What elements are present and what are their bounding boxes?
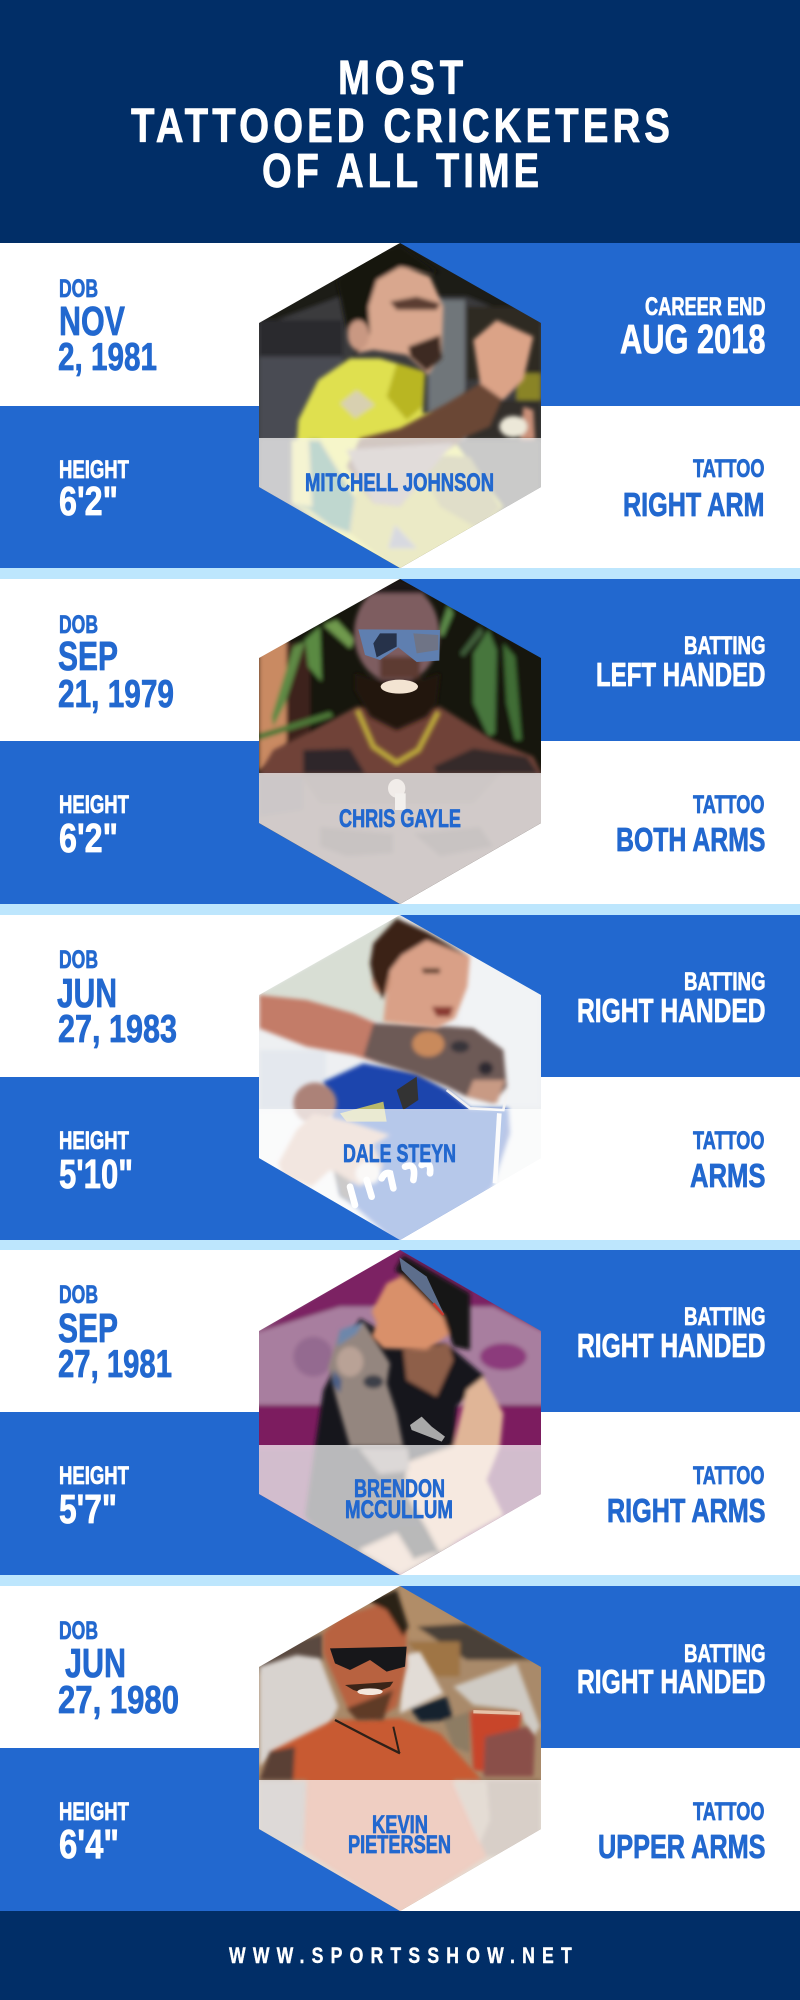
DOB block: SEP [58,633,118,679]
name: Kevin Pietersen [348,1811,451,1859]
batting block: BATTING [684,632,766,660]
photo: Brendon McCullum hexagon [253,1243,547,1582]
necklace and pendant [357,710,438,763]
DOB block: JUN [57,970,117,1016]
height block [59,1798,129,1867]
DOB block: DOB [59,611,98,639]
name: Brendon McCullum: BRENDON [354,1475,445,1503]
hand and ball [278,1113,390,1203]
name: Brendon McCullum [345,1475,453,1524]
glass and hand [470,1712,535,1777]
name: Brendon McCullum: MCCULLUM [345,1496,453,1524]
panel: Chris Gayle [0,570,800,907]
tattoo block: TATTOO [693,1798,764,1826]
separator strips [0,568,800,1586]
tattoo block: TATTOO [693,1127,764,1155]
height block [59,1127,133,1197]
face, beard, glasses [354,579,440,730]
tattoo block: TATTOO [693,791,764,819]
DOB block [58,1617,179,1722]
panel: Brendon McCullum [0,1243,800,1582]
title: TATTOOED CRICKETERS [131,100,674,153]
height block: 5'10" [59,1151,133,1197]
title: MOST [338,52,468,105]
torso with tattoos [253,707,547,907]
DOB block [58,275,157,379]
photo: Dale Steyn hexagon [253,907,547,1243]
batting block [577,1303,766,1364]
height block [59,456,129,524]
face and hair [370,918,470,1028]
photo: Chris Gayle hexagon [253,570,547,907]
height block: HEIGHT [59,1462,129,1490]
career end block [620,293,766,362]
tattoo block [690,1127,766,1194]
DOB block: DOB [59,1617,98,1645]
panel: Kevin Pietersen [0,1580,800,1913]
tattoo block [616,791,766,858]
name: Kevin Pietersen: KEVIN [372,1811,428,1839]
panel: Mitchell Johnson [0,240,800,573]
height block: HEIGHT [59,1798,129,1826]
footer band [0,1911,800,2000]
DOB block: JUN [65,1640,126,1686]
DOB block [58,1281,172,1386]
tattoo block [607,1462,766,1529]
batting block: BATTING [684,1640,766,1668]
photo: Kevin Pietersen hexagon [253,1580,547,1913]
deck chairs [259,1652,540,1767]
DOB block: DOB [59,1281,98,1309]
name: Dale Steyn: DALE STEYN [343,1140,456,1168]
tattooed arm, hand and ball [347,320,535,507]
batting block: BATTING [684,1303,766,1331]
batting block [596,632,766,693]
height block: HEIGHT [59,1127,129,1155]
height block: 5'7" [59,1486,117,1532]
tattooed arm [328,1322,403,1447]
DOB block: DOB [59,946,98,974]
DOB block [57,946,177,1051]
face and hair [337,245,443,375]
height block [59,1462,129,1532]
height block: HEIGHT [59,791,129,819]
DOB block: 27, 1980 [58,1679,179,1722]
height block: HEIGHT [59,456,129,484]
DOB block: 27, 1981 [58,1343,172,1386]
title [131,52,674,198]
DOB block: 2, 1981 [58,336,157,379]
height block: 6'4" [59,1821,119,1867]
tattooed arm [259,995,507,1103]
panel: Dale Steyn [0,907,800,1243]
DOB block: 21, 1979 [58,673,174,716]
jersey [323,1063,510,1243]
DOB block: NOV [59,298,125,344]
tattoo block [623,455,764,523]
name: Chris Gayle: CHRIS GAYLE [339,805,461,833]
title: OF ALL TIME [262,145,543,198]
DOB block [58,611,174,716]
header band [0,0,800,243]
jersey lettering [350,1164,430,1205]
footer website: WWW.SPORTSSHOW.NET [229,1943,579,1968]
torso [259,1718,490,1913]
jersey [292,358,503,573]
name: Kevin Pietersen: PIETERSEN [348,1831,451,1859]
batting block [577,968,766,1029]
height block [59,791,129,861]
tattoo block [598,1798,766,1865]
DOB block: 27, 1983 [58,1008,177,1051]
tattoo block: TATTOO [693,455,764,483]
height block: 6'2" [59,815,118,861]
batting block: BATTING [684,968,766,996]
DOB block: DOB [59,275,98,303]
photo: Mitchell Johnson hexagon [253,240,547,573]
tattoo block: ARMS [690,1157,766,1194]
height block: 6'2" [59,478,118,524]
head and cap [372,1255,470,1350]
batting block [577,1640,766,1700]
DOB block: SEP [58,1305,118,1351]
tattoo block: TATTOO [693,1462,764,1490]
vest and arms [305,1318,503,1575]
head [323,1590,408,1722]
name: Mitchell Johnson: MITCHELL JOHNSON [305,469,494,497]
